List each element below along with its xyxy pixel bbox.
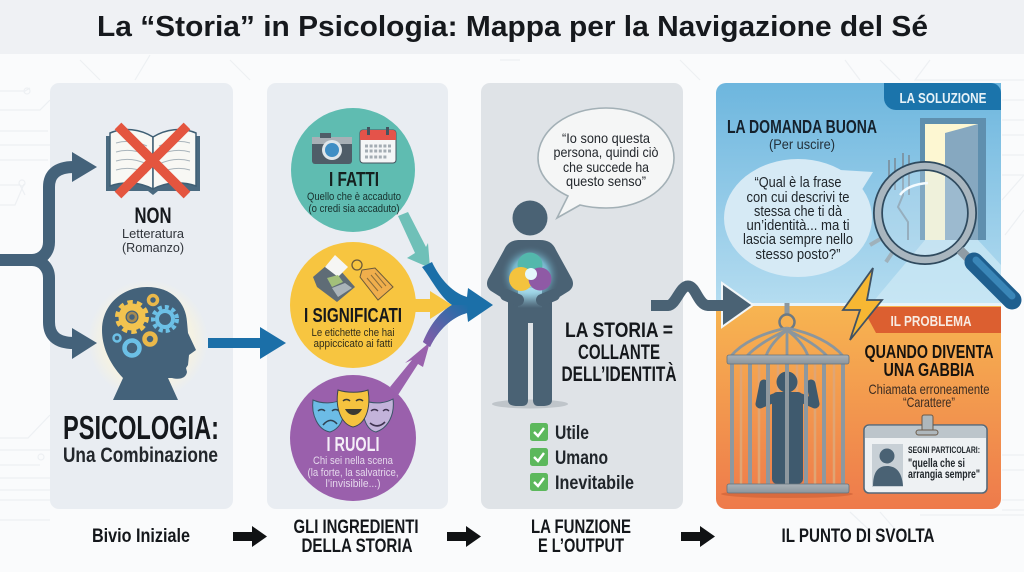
text: non letteratura: NON xyxy=(134,203,172,228)
icon: crossed-out book xyxy=(106,126,200,195)
icon: calendar xyxy=(360,127,396,163)
ingredient: i significati: Le etichette che hai xyxy=(312,327,394,339)
ingredient: i fatti: I FATTI xyxy=(329,169,379,191)
tag: il problema: IL PROBLEMA xyxy=(890,313,972,330)
id badge: "quella che si xyxy=(908,458,965,470)
icon: theatre masks xyxy=(313,390,393,432)
speech bubble: good question: un’identità... ma ti xyxy=(746,217,850,234)
text: la storia collante: COLLANTE xyxy=(578,341,660,364)
ingredient: i fatti xyxy=(291,108,415,232)
text: psicologia: PSICOLOGIA: xyxy=(63,409,219,446)
arrows: step connectors xyxy=(233,526,715,547)
speech bubble: good question: lascia sempre nello xyxy=(743,231,853,248)
ingredient: i ruoli: (la forte, la salvatrice, xyxy=(308,467,398,479)
ingredient: i significati: I SIGNIFICATI xyxy=(304,305,402,327)
icon: open door xyxy=(872,118,1001,303)
heading: quando diventa una gabbia xyxy=(864,342,994,410)
heading: la domanda buona: (Per uscire) xyxy=(769,136,835,152)
arrows: merging into story xyxy=(390,212,493,395)
text: psicologia xyxy=(63,409,219,467)
icon: cage with person xyxy=(721,303,853,498)
arrow: function to turning point xyxy=(651,283,753,327)
checklist: Umano xyxy=(555,448,608,469)
ingredient: i fatti: Quello che è accaduto xyxy=(307,191,401,203)
speech bubble: che succede ha xyxy=(563,159,649,175)
step: funzione: LA FUNZIONE xyxy=(531,517,631,538)
speech bubble: good question: con cui descrivi te xyxy=(746,189,850,206)
heading: quando diventa una gabbia: UNA GABBIA xyxy=(884,360,975,380)
heading: la domanda buona xyxy=(727,117,877,152)
step labels xyxy=(92,517,935,557)
heading: quando diventa una gabbia: Chiamata erroneamente xyxy=(868,381,990,397)
ingredient: i ruoli xyxy=(290,375,416,501)
text: la storia collante xyxy=(562,319,676,386)
step: ingredienti xyxy=(294,517,418,557)
id badge: arrangia sempre" xyxy=(908,469,980,481)
speech bubble: questo senso” xyxy=(566,173,646,189)
speech bubble: good question: “Qual è la frase xyxy=(754,174,842,191)
person in cage xyxy=(760,372,815,484)
panel: funzione xyxy=(481,83,683,509)
panel: bivio iniziale xyxy=(50,83,233,509)
speech bubble: good question xyxy=(724,159,873,277)
step: bivio iniziale: Bivio Iniziale xyxy=(92,526,190,547)
arrow: branching fork xyxy=(0,152,97,359)
step: funzione: E L’OUTPUT xyxy=(538,536,624,557)
tag: il problema xyxy=(862,307,1001,333)
title band xyxy=(0,0,1024,54)
tag: la soluzione xyxy=(884,83,1001,110)
ingredient: i significati: appiccicato ai fatti xyxy=(314,338,392,350)
ingredient: i ruoli: l’invisibile...) xyxy=(326,478,380,490)
speech bubble: persona, quindi ciò xyxy=(554,144,659,160)
speech bubble xyxy=(538,108,674,218)
panel: la soluzione xyxy=(716,83,1012,303)
icon: head with gears xyxy=(88,280,208,400)
ingredient: i ruoli: I RUOLI xyxy=(326,434,380,456)
ingredient: i significati xyxy=(290,242,416,368)
text: non letteratura: Letteratura xyxy=(122,226,185,241)
speech bubble: good question: stessa che ti dà xyxy=(754,203,843,220)
step: punto di svolta: IL PUNTO DI SVOLTA xyxy=(782,526,935,547)
heading: quando diventa una gabbia: QUANDO DIVENTA xyxy=(864,342,994,362)
step: ingredienti: DELLA STORIA xyxy=(302,536,413,557)
text: la storia collante: LA STORIA = xyxy=(565,319,673,342)
ingredient: i ruoli: Chi sei nella scena xyxy=(313,455,394,467)
icon: magnifying glass xyxy=(870,153,1012,300)
checklist: Utile xyxy=(555,423,589,444)
tag: la soluzione: LA SOLUZIONE xyxy=(900,90,986,107)
speech bubble: “Io sono questa xyxy=(562,130,650,146)
speech bubble: good question: stesso posto?” xyxy=(756,246,840,263)
icon: camera xyxy=(312,133,352,164)
panel: ingredienti xyxy=(267,83,448,509)
icon: price tag xyxy=(352,260,393,300)
title: La “Storia” in Psicologia: Mappa per la Navigazione del Sé xyxy=(97,11,928,43)
text: non letteratura: (Romanzo) xyxy=(122,240,184,255)
text: la storia collante: DELL’IDENTITÀ xyxy=(562,363,676,386)
ingredient: i fatti: (o credi sia accaduto) xyxy=(308,203,400,215)
heading: quando diventa una gabbia: “Carattere” xyxy=(903,394,955,410)
checklist xyxy=(530,423,634,494)
step: ingredienti: GLI INGREDIENTI xyxy=(294,517,418,538)
step: funzione xyxy=(531,517,631,557)
icon: lightning bolt xyxy=(843,268,882,340)
icon: person holding story xyxy=(487,200,573,408)
checklist: Inevitabile xyxy=(555,473,634,494)
icon: pos terminal xyxy=(313,255,355,302)
text: non letteratura xyxy=(122,203,185,255)
panel: il problema xyxy=(716,303,1001,509)
heading: la domanda buona: LA DOMANDA BUONA xyxy=(727,117,877,137)
arrow: blue to ingredients xyxy=(208,327,286,359)
id badge xyxy=(864,415,987,493)
text: psicologia: Una Combinazione xyxy=(63,444,218,467)
id badge: SEGNI PARTICOLARI: xyxy=(908,445,980,455)
